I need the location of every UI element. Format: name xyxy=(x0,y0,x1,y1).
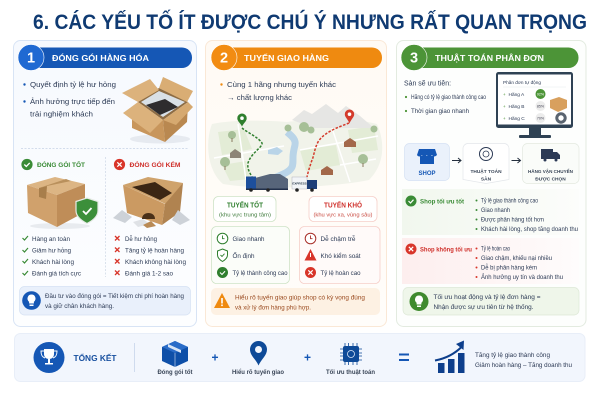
section: shop không tối ưu: Shop không tối ưu xyxy=(420,246,472,254)
list: hậu quả đóng gói kém: Tăng tỷ lệ hoàn hàng xyxy=(125,248,184,254)
label: tuyến khó xyxy=(309,196,377,222)
box: đặc điểm tuyến khó: Khó kiểm soát xyxy=(320,252,361,260)
section: shop không tối ưu xyxy=(402,238,579,284)
bullets: vai trò đóng gói: Ảnh hưởng trực tiếp đến xyxy=(30,97,115,106)
label: tuyến khó: (khu vực xa, vùng sâu) xyxy=(314,212,373,218)
callout: tối ưu hoạt động: Tối ưu hoạt động và tỷ lệ đơn hàng = xyxy=(434,292,541,301)
icon: monitor phân đơn tự động: 85% xyxy=(537,104,545,108)
icon: red pin xyxy=(345,110,354,124)
heading: đóng gói tốt: ĐÓNG GÓI TỐT xyxy=(37,159,86,169)
flow: thuật toán sàn xyxy=(463,144,509,184)
text: sàn ưu tiên: Thời gian giao nhanh xyxy=(411,109,469,115)
callout: tối ưu hoạt động xyxy=(403,288,579,315)
box: đặc điểm tuyến tốt: Tỷ lệ thành công cao xyxy=(232,270,288,277)
section: shop tối ưu tốt: Khách hài lòng, shop tăng doanh thu xyxy=(481,227,578,233)
callout: hiểu rõ tuyến giao: và xử lý đơn hàng phù hợp. xyxy=(235,304,311,312)
header: đóng gói hàng hóa: 1 xyxy=(27,50,35,66)
section: shop tối ưu tốt: Giao nhanh xyxy=(481,208,510,214)
icon: damaged box xyxy=(113,177,190,228)
list: lợi ích đóng gói tốt: Giảm hư hỏng xyxy=(32,246,71,254)
section: shop tối ưu tốt: Tỷ lệ giao thành công cao xyxy=(481,198,539,204)
text: kết quả xyxy=(475,352,572,369)
heading: đóng gói kém: ĐÓNG GÓI KÉM xyxy=(130,160,181,169)
section: shop không tối ưu: Tỷ lệ hoàn cao xyxy=(481,246,510,252)
icon: warehouse and trucks: EXPRESS xyxy=(292,182,307,186)
icon: green pin xyxy=(237,114,247,126)
panel: đóng gói hàng hóa xyxy=(14,40,196,326)
section: shop tối ưu tốt xyxy=(402,189,579,235)
list: hậu quả đóng gói kém: Khách không hài lòng xyxy=(125,259,186,266)
list: lợi ích đóng gói tốt: Hàng an toàn xyxy=(32,236,70,243)
map: hai tuyến giao xyxy=(208,104,382,187)
bullets: vai trò đóng gói xyxy=(23,80,116,118)
panel: tuyến giao hàng xyxy=(206,40,386,326)
bullets: chất lượng tuyến xyxy=(220,80,336,102)
bullets: chất lượng tuyến: Cùng 1 hãng nhưng tuyến khác xyxy=(227,80,336,89)
header: tuyến giao hàng: 2 xyxy=(220,50,228,66)
label: tuyến tốt xyxy=(214,196,276,222)
text: kết quả: Giảm hoàn hàng – Tăng doanh thu xyxy=(475,362,572,369)
callout: đầu tư đóng gói: Đầu tư vào đóng gói = Tiết kiệm chi phí hoàn hàng xyxy=(45,294,184,300)
text: kết quả: Tăng tỷ lệ giao thành công xyxy=(475,352,550,359)
header: thuật toán phân đơn: THUẬT TOÁN PHÂN ĐƠN xyxy=(435,52,544,63)
flow: thuật toán sàn: SÀN xyxy=(481,176,492,182)
box: đặc điểm tuyến tốt xyxy=(212,226,290,284)
callout: hiểu rõ tuyến giao xyxy=(211,288,380,315)
icon: monitor phân đơn tự động: 92% xyxy=(537,92,545,96)
box: đặc điểm tuyến khó xyxy=(300,226,380,284)
arrow: algorithm to carrier xyxy=(512,158,520,163)
icon: monitor phân đơn tự động: Hãng A xyxy=(508,92,525,98)
panel: thuật toán phân đơn xyxy=(396,40,586,326)
callout: hiểu rõ tuyến giao: Hiểu rõ tuyến giao giúp shop có kỳ vọng đúng xyxy=(235,294,365,302)
header: tuyến giao hàng xyxy=(211,44,382,70)
header: thuật toán phân đơn xyxy=(401,44,578,70)
box: đặc điểm tuyến khó: Dễ chậm trễ xyxy=(320,234,356,243)
equals xyxy=(399,354,409,360)
plus: + xyxy=(211,350,219,364)
heading: tổng kết: TỔNG KẾT xyxy=(74,352,117,363)
bullets: chất lượng tuyến: → chất lượng khác xyxy=(227,93,292,102)
item: tối ưu thuật toán xyxy=(326,343,375,376)
callout: đầu tư đóng gói: và giữ chân khách hàng. xyxy=(45,304,114,310)
panel: tổng kết xyxy=(14,334,585,382)
text: sàn ưu tiên: Hãng có tỷ lệ giao thành công cao xyxy=(411,94,487,101)
icon: intact box with shield xyxy=(27,177,98,229)
bullets: vai trò đóng gói: Quyết định tỷ lệ hư hỏng xyxy=(30,80,116,89)
plus: + xyxy=(304,350,311,364)
list: lợi ích đóng gói tốt: Khách hài lòng xyxy=(32,259,74,266)
label: tuyến tốt: (khu vực trung tâm) xyxy=(219,212,271,218)
item: hiểu rõ tuyến giao: Hiểu rõ tuyến giao xyxy=(232,369,284,376)
icon: monitor phân đơn tự động xyxy=(496,72,573,138)
list: hậu quả đóng gói kém: Đánh giá 1-2 sao xyxy=(125,270,173,278)
flow: hãng vận chuyển được chọn: HÃNG VẬN CHUYỂN xyxy=(528,168,573,175)
icon: warehouse and trucks xyxy=(246,174,317,192)
item: hiểu rõ tuyến giao xyxy=(232,341,284,376)
icon: monitor phân đơn tự động: Hãng B xyxy=(508,104,524,110)
box: đặc điểm tuyến tốt: Ổn định xyxy=(232,251,255,260)
icon: monitor phân đơn tự động: + xyxy=(503,92,506,97)
item: đóng gói tốt: Đóng gói tốt xyxy=(158,369,192,376)
section: shop không tối ưu: Dễ bị phân hàng kém xyxy=(481,264,537,272)
icon: growth chart xyxy=(435,340,464,373)
callout: tối ưu hoạt động: Nhận được sự ưu tiên từ hệ thống. xyxy=(434,302,534,311)
box: đặc điểm tuyến tốt: Giao nhanh xyxy=(232,236,265,243)
icon: monitor phân đơn tự động: + xyxy=(503,104,506,109)
label: tuyến khó: TUYẾN KHÓ xyxy=(324,200,362,210)
text: sàn ưu tiên: Sàn sẽ ưu tiên: xyxy=(404,78,451,88)
list: lợi ích đóng gói tốt xyxy=(22,236,82,278)
heading: đóng gói tốt xyxy=(21,159,86,170)
list: hậu quả đóng gói kém: Dễ hư hỏng xyxy=(125,234,157,243)
flow: shop xyxy=(404,144,450,180)
item: đóng gói tốt xyxy=(158,341,192,376)
callout: đầu tư đóng gói xyxy=(20,286,190,315)
header: đóng gói hàng hóa: ĐÓNG GÓI HÀNG HÓA xyxy=(52,52,149,63)
icon: monitor phân đơn tự động: Hãng C xyxy=(508,116,525,122)
section: shop không tối ưu: Ảnh hưởng uy tín và doanh thu xyxy=(481,274,563,281)
list: lợi ích đóng gói tốt: Đánh giá tích cực xyxy=(32,270,82,278)
item: tối ưu thuật toán: Tối ưu thuật toán xyxy=(326,369,375,376)
icon: monitor phân đơn tự động: 70% xyxy=(537,116,545,120)
arrow: shop to algorithm xyxy=(452,158,461,163)
header: thuật toán phân đơn: 3 xyxy=(410,50,418,66)
icon: trophy xyxy=(34,342,64,373)
bullets: vai trò đóng gói: trải nghiệm khách xyxy=(30,110,93,118)
box: đặc điểm tuyến khó: Tỷ lệ hoàn cao xyxy=(320,270,361,277)
section: shop tối ưu tốt: Được phân hàng tốt hơn xyxy=(481,218,544,224)
flow: shop: SHOP xyxy=(418,171,436,177)
flow: thuật toán sàn: THUẬT TOÁN xyxy=(470,168,502,175)
heading: đóng gói kém xyxy=(114,159,181,170)
header: tuyến giao hàng: TUYẾN GIAO HÀNG xyxy=(244,53,329,63)
icon: monitor phân đơn tự động: + xyxy=(503,116,506,121)
icon: monitor phân đơn tự động: Phân đơn tự động xyxy=(503,80,542,85)
text: sàn ưu tiên xyxy=(404,78,487,115)
section: shop tối ưu tốt: Shop tối ưu tốt xyxy=(420,198,465,206)
header: đóng gói hàng hóa xyxy=(18,44,192,70)
icon: open cardboard box xyxy=(122,77,193,144)
list: hậu quả đóng gói kém xyxy=(115,234,186,278)
flow: hãng vận chuyển được chọn xyxy=(522,144,579,184)
label: tuyến tốt: TUYẾN TỐT xyxy=(227,200,263,210)
section: shop không tối ưu: Giao chậm, khiếu nại nhiều xyxy=(481,256,552,262)
flow: hãng vận chuyển được chọn: ĐƯỢC CHỌN xyxy=(535,176,566,182)
